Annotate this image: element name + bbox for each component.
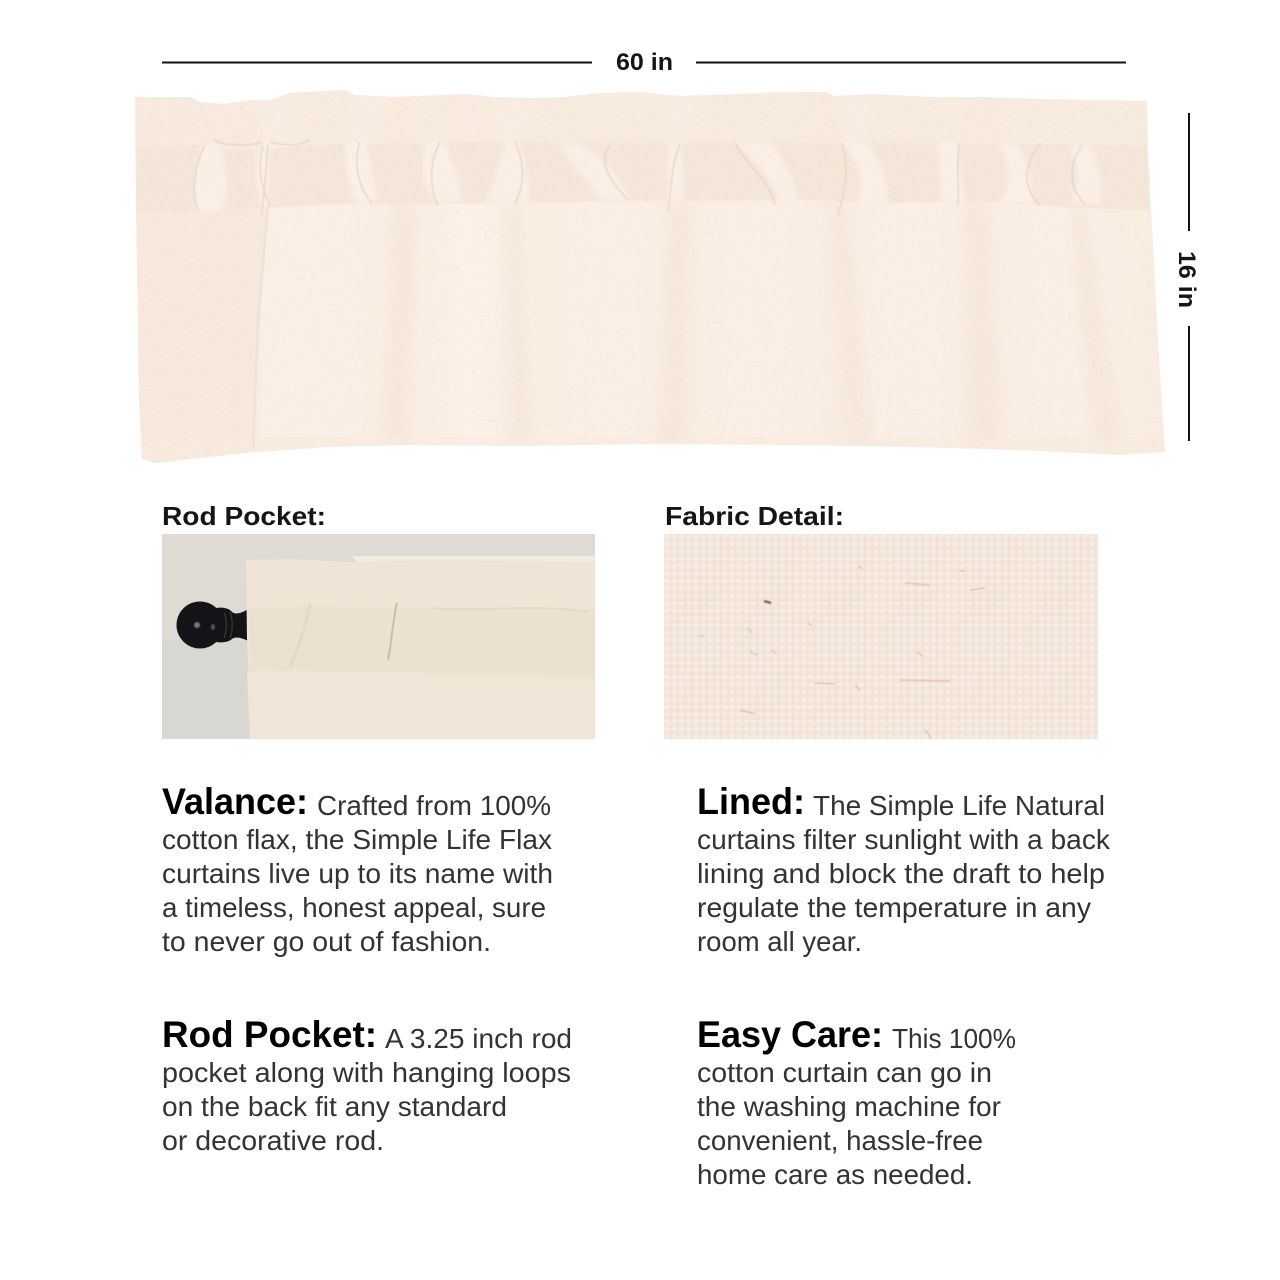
- text block: Lined: The Simple Life Natural: [813, 790, 1105, 821]
- text block: Easy Care: This 100%: [892, 1023, 1016, 1054]
- pocket band: [248, 606, 595, 676]
- text block: Valance: curtains live up to its name with: [162, 858, 553, 889]
- text block: Rod Pocket: pocket along with hanging loops: [162, 1057, 571, 1088]
- text block: Lined: Lined:: [697, 781, 805, 822]
- heading: Rod Pocket: Rod Pocket:: [162, 501, 326, 531]
- text block: Easy Care: cotton curtain can go in: [697, 1057, 992, 1088]
- text block: Easy Care: the washing machine for: [697, 1091, 1001, 1122]
- text block: Valance: Valance:: [162, 781, 308, 822]
- crease: [388, 603, 397, 660]
- lower hem band: [130, 437, 1170, 467]
- photo: flax valance curtain: [130, 85, 1170, 470]
- photo: fabric weave close-up: [664, 534, 1098, 739]
- text block: Valance: cotton flax, the Simple Life Flax: [162, 824, 552, 855]
- photo: rod pocket with black finial: [162, 534, 595, 739]
- text block: Rod Pocket: A 3.25 inch rod: [385, 1023, 572, 1054]
- left hanging panel shade: [263, 210, 266, 237]
- fabric flecks: [699, 566, 985, 739]
- text block: Lined: lining and block the draft to help: [697, 858, 1105, 889]
- text block: Valance: Crafted from 100%: [317, 790, 551, 821]
- gathered puckers: [196, 142, 1100, 212]
- text block: Valance: [162, 781, 553, 957]
- long drape edge fold: [253, 205, 268, 450]
- text block: Valance: to never go out of fashion.: [162, 926, 491, 957]
- rod pocket band: [135, 142, 1150, 214]
- fabric grain: [200, 168, 1085, 449]
- finial: [176, 602, 248, 648]
- text block: Lined: room all year.: [697, 926, 862, 957]
- white window trim: [352, 556, 595, 562]
- text block: Rod Pocket: Rod Pocket:: [162, 1014, 377, 1055]
- dimension: 16 in: 16 in: [1173, 251, 1200, 308]
- text block: Valance: a timeless, honest appeal, sure: [162, 892, 546, 923]
- curtain fabric: [246, 559, 595, 678]
- text block: Lined: [697, 781, 1110, 957]
- soft vertical drape shading: [516, 344, 1101, 432]
- text block: Lined: curtains filter sunlight with a back: [697, 824, 1110, 855]
- text block: Rod Pocket: or decorative rod.: [162, 1125, 384, 1156]
- gather crease shadows: [194, 140, 1085, 215]
- text block: Rod Pocket: on the back fit any standard: [162, 1091, 507, 1122]
- heading: Fabric Detail: Fabric Detail:: [665, 501, 844, 531]
- text block: Easy Care: convenient, hassle-free: [697, 1125, 983, 1156]
- text block: Lined: regulate the temperature in any: [697, 892, 1091, 923]
- text block: Easy Care: Easy Care:: [697, 1014, 883, 1055]
- top heading above the pocket: [286, 90, 1103, 100]
- text block: Easy Care: [697, 1014, 1016, 1190]
- text block: Easy Care: home care as needed.: [697, 1159, 973, 1190]
- text block: Rod Pocket: [162, 1014, 572, 1156]
- width dimension: 60 in: 60 in: [616, 49, 673, 76]
